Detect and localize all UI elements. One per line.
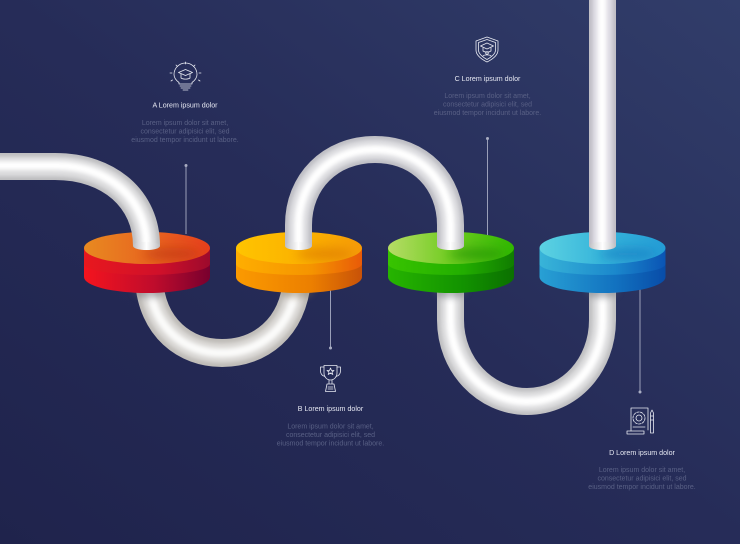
text block D: D Lorem ipsum dolor [609, 449, 676, 457]
icon: light bulb with graduation cap [170, 62, 201, 90]
connector line A [184, 164, 188, 234]
disc C (green) [388, 232, 514, 293]
icon: trophy [320, 366, 340, 392]
text block A: A Lorem ipsum dolor [152, 102, 218, 110]
connector line C [486, 137, 489, 235]
icon: shield with graduation cap [476, 37, 498, 62]
lower tube between discs A and B [133, 280, 313, 353]
disc B (orange) [236, 232, 362, 293]
text block C: Lorem ipsum dolor sit amet, [444, 93, 531, 100]
upper tube entering disc A from left [0, 166, 160, 250]
text block B: B Lorem ipsum dolor [298, 405, 364, 413]
disc A (red) [84, 232, 210, 293]
lower tube between discs C and D [434, 280, 618, 402]
text block C: eiusmod tempor incidunt ut labore. [434, 110, 541, 117]
text block C [434, 75, 541, 117]
connector line D [638, 288, 642, 394]
text block B: Lorem ipsum dolor sit amet, [287, 424, 374, 430]
text block A: consectetur adipisici elit, sed [140, 128, 230, 136]
vertical tube entering disc D from top [589, 0, 616, 250]
text block D: consectetur adipisici elit, sed [597, 476, 687, 482]
text block D [588, 449, 696, 491]
text block D: Lorem ipsum dolor sit amet, [599, 467, 685, 474]
text block B [277, 405, 384, 448]
connector line B [329, 290, 332, 350]
text block C: consectetur adipisici elit, sed [443, 102, 532, 108]
icon: document with gear and pencil [627, 408, 654, 434]
upper arch tube from disc B to disc C [285, 150, 464, 250]
text block D: eiusmod tempor incidunt ut labore. [588, 484, 696, 491]
text block A [131, 102, 239, 144]
text block C: C Lorem ipsum dolor [455, 75, 521, 83]
disc D (blue) [540, 232, 666, 293]
text block B: consectetur adipisici elit, sed [286, 432, 375, 439]
text block A: Lorem ipsum dolor sit amet, [142, 120, 228, 127]
text block B: eiusmod tempor incidunt ut labore. [277, 440, 384, 448]
text block A: eiusmod tempor incidunt ut labore. [131, 137, 239, 144]
